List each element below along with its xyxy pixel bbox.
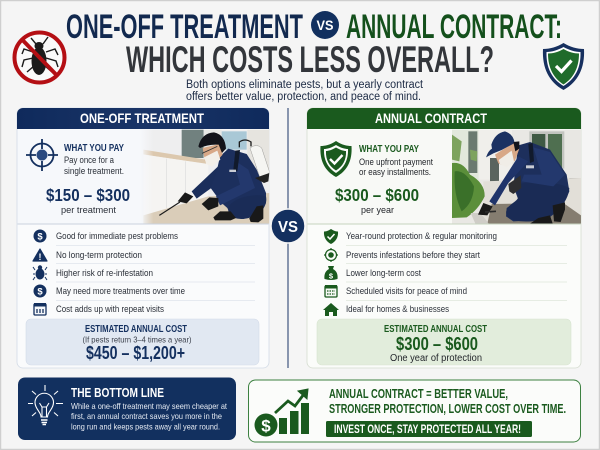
icon: no bugs sign: [14, 32, 64, 82]
panel: annual contract: [307, 108, 581, 368]
row: scheduled: [325, 285, 467, 297]
row: lower cost: $: [329, 272, 334, 280]
far arm and glove: [192, 166, 218, 199]
verdict text: ANNUAL CONTRACT = BETTER VALUE,: [329, 387, 508, 401]
row: more treatments: May need more treatments over time: [56, 286, 185, 297]
panel header: annual: ANNUAL CONTRACT: [375, 110, 487, 126]
cost box: annual: One year of protection: [390, 353, 482, 364]
cost box: annual: $300 – $600: [396, 334, 478, 354]
what you pay: one-off: [46, 143, 130, 216]
banner: invest once: INVEST ONCE, STAY PROTECTED ALL YEAR!: [334, 424, 521, 436]
what you pay: annual: or easy installments.: [359, 167, 431, 177]
row: re-infestation: Higher risk of re-infestation: [56, 268, 153, 279]
panel: the bottom line: [18, 378, 236, 440]
what you pay: one-off: WHAT YOU PAY: [64, 143, 124, 154]
shoes: [530, 215, 553, 224]
row: year-round: Year-round protection & regular monitoring: [346, 231, 497, 242]
vs badge: VS: [278, 219, 298, 236]
row: good for immediate: Good for immediate pest problems: [56, 231, 178, 242]
row: ideal: Ideal for homes & businesses: [346, 304, 449, 315]
bottom line text: long run and keeps pests away all year round.: [71, 422, 220, 432]
photo: technician inspecting outdoors: [452, 130, 581, 224]
subtitle: Both options eliminate pests, but a yearly contract: [186, 79, 424, 91]
shoes: [213, 211, 236, 220]
subtitle: [186, 79, 424, 103]
row: lower cost: Lower long-term cost: [346, 268, 421, 279]
icon: growth chart with coin: $: [261, 416, 271, 436]
what you pay: one-off: Pay once for a: [64, 155, 114, 165]
row: prevents: [324, 248, 480, 262]
banner: invest once: [326, 421, 532, 437]
icon: crosshair target: [26, 139, 58, 171]
what you pay: annual: WHAT YOU PAY: [359, 144, 419, 155]
body: [506, 142, 569, 221]
cost box: annual: [317, 319, 571, 365]
row: good for immediate: [34, 230, 178, 242]
gloves: [478, 203, 493, 215]
icon: green shield: [543, 43, 584, 90]
verdict text: [329, 387, 566, 416]
bush: [452, 163, 485, 218]
what you pay: one-off: single treatment.: [64, 166, 124, 176]
cost box: annual: ESTIMATED ANNUAL COST: [384, 324, 487, 335]
row: no long-term: !: [38, 252, 42, 262]
icon: growth chart with coin: [254, 389, 309, 436]
title: [66, 8, 562, 80]
panel: one-off treatment: [17, 108, 269, 368]
checklist: one-off: [33, 230, 255, 315]
arm: [489, 156, 528, 205]
row: scheduled: Scheduled visits for peace of mind: [346, 286, 467, 297]
bottom line text: [71, 385, 228, 432]
bottom line text: THE BOTTOM LINE: [71, 385, 164, 400]
head: [495, 143, 519, 167]
title: ONE-OFF TREATMENT: [66, 8, 303, 46]
divider: [287, 108, 289, 368]
what you pay: annual: $300 – $600: [335, 185, 419, 205]
vs badge: [271, 209, 305, 243]
row: lower cost: [324, 266, 421, 280]
title: VS: [316, 17, 334, 33]
row: re-infestation: [33, 265, 153, 280]
panel header: one-off: ONE-OFF TREATMENT: [80, 110, 204, 126]
row: cost adds up: Cost adds up with repeat visits: [56, 304, 164, 315]
cost box: one-off: [26, 319, 259, 365]
bottom line text: first, an annual contract saves you more in the: [71, 411, 222, 421]
row: prevents: Prevents infestations before they start: [346, 250, 480, 261]
icon: light bulb: [28, 385, 63, 424]
row: more treatments: [34, 284, 185, 298]
panel header: one-off: [17, 108, 269, 129]
icon: shield check: [320, 141, 352, 177]
what you pay: one-off: $150 – $300: [46, 185, 130, 205]
cost box: one-off: ESTIMATED ANNUAL COST: [85, 324, 187, 335]
near arm and glove: [216, 160, 255, 205]
what you pay: annual: per year: [361, 205, 394, 216]
body: [211, 149, 266, 219]
bottom line text: While a one-off treatment may seem cheaper at: [71, 401, 228, 411]
photo: technician spraying indoors: [140, 130, 269, 224]
subtitle: offers better value, protection, and peace of mind.: [186, 91, 421, 103]
what you pay: one-off: per treatment: [61, 205, 116, 216]
tank: [250, 145, 269, 178]
row: good for immediate: $: [37, 232, 43, 242]
checklist: annual: [323, 229, 567, 316]
cost box: one-off: $450 – $1,200+: [86, 343, 185, 363]
row: ideal: [323, 303, 449, 316]
row: no long-term: [33, 249, 142, 262]
panel: annual contract verdict: [248, 380, 580, 442]
row: cost adds up: [34, 303, 164, 315]
row: more treatments: $: [37, 286, 43, 298]
row: year-round: [324, 229, 497, 244]
head: [203, 144, 223, 163]
panel header: annual: [307, 108, 581, 129]
cost box: one-off: (If pests return 3–4 times a year): [82, 334, 192, 344]
straps: [233, 150, 240, 171]
row: no long-term: No long-term protection: [56, 250, 142, 261]
what you pay: annual: One upfront payment: [359, 157, 433, 167]
what you pay: annual: [335, 144, 433, 216]
